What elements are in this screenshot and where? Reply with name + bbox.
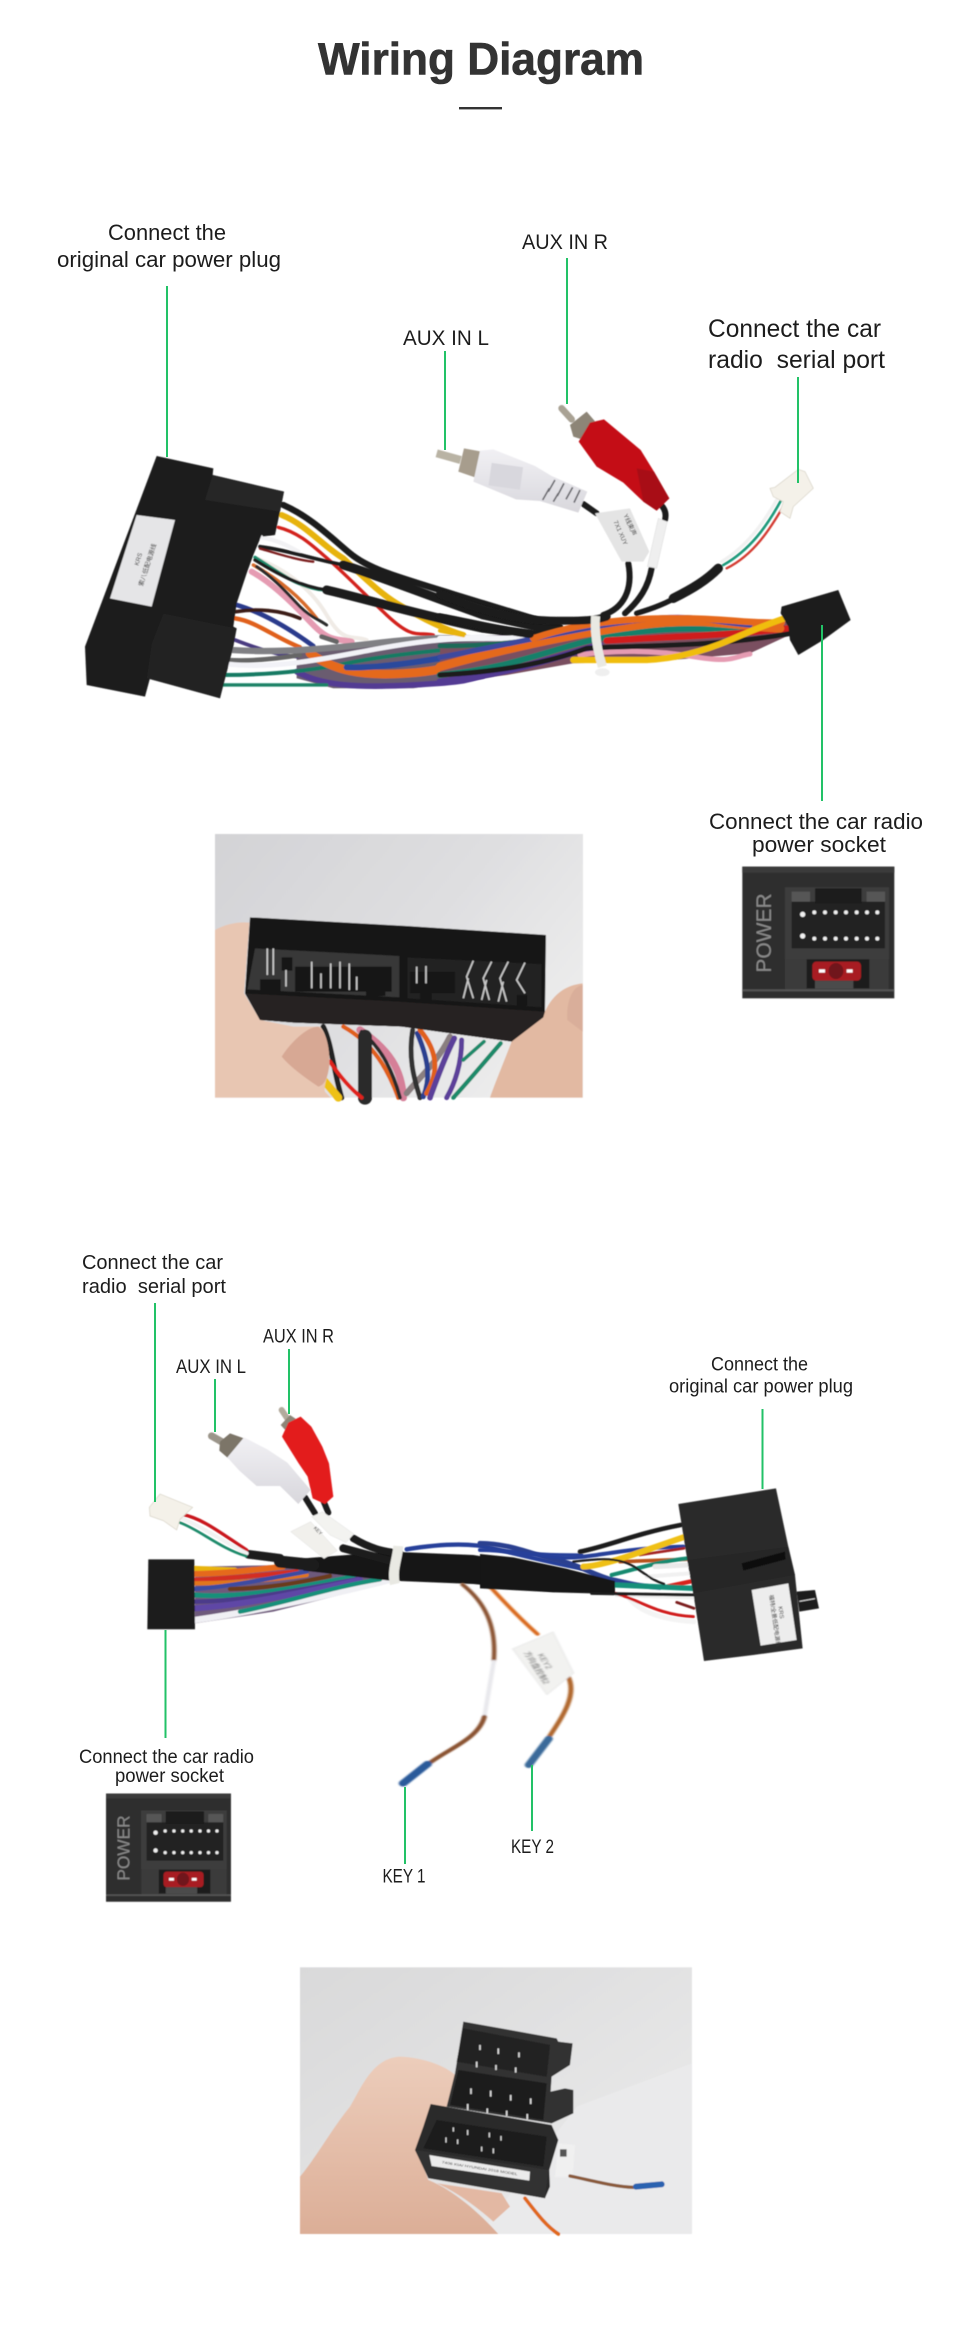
- leader: AUX IN R: [566, 258, 568, 404]
- bundle backing: [297, 628, 573, 688]
- leader: serial port: [797, 377, 799, 483]
- label: serial port: [708, 315, 885, 374]
- lower connector: [415, 2104, 558, 2198]
- harness 1 right: RCA plugs, serial port, socket: [437, 408, 851, 683]
- leader: AUX IN L: [444, 351, 446, 450]
- harness 2 left: serial port, RCA plugs, socket, bundle: [147, 1410, 582, 1629]
- label: original car power plug: Connect the: [711, 1354, 808, 1376]
- leader: serial port: [154, 1303, 156, 1502]
- plug body: [678, 1488, 803, 1661]
- harness 2 key wires: [403, 1585, 574, 1783]
- serial port connector: [770, 469, 813, 518]
- white tag and key wire: [555, 2143, 662, 2187]
- RCA tag: [595, 508, 649, 562]
- right hand: [490, 983, 583, 1098]
- serial port wires: [722, 500, 786, 568]
- label: original car power plug: original car power plug: [57, 247, 281, 272]
- power socket photo 2: POWER: [114, 1815, 134, 1881]
- plug body: [85, 456, 284, 698]
- plug paper label: [752, 1583, 797, 1648]
- leader: power socket: [821, 625, 823, 801]
- plug paper label: KRS: [776, 1606, 784, 1619]
- RCA plug white: [437, 448, 587, 513]
- RCA tag: 7X1 XUY: [611, 520, 629, 547]
- leader: AUX IN R: [288, 1349, 290, 1414]
- hand: [300, 2057, 498, 2234]
- label: KEY 1: KEY 1: [382, 1866, 426, 1888]
- harness 2 right: car power plug: [480, 1488, 819, 1661]
- power socket wires: [195, 1567, 390, 1620]
- blue wires: [407, 1545, 582, 1568]
- paper label: [429, 2155, 530, 2181]
- label: power socket: [709, 809, 923, 857]
- RCA sleeve: [647, 518, 667, 568]
- label: power socket: Connect the car radio: [709, 809, 923, 834]
- cable tie: [595, 616, 610, 676]
- label: serial port: Connect the car: [82, 1252, 223, 1274]
- label: AUX IN L: AUX IN L: [403, 327, 489, 350]
- fan-out wires: [222, 515, 483, 686]
- black cables: [303, 1552, 582, 1592]
- label: KEY 2: KEY 2: [511, 1837, 554, 1858]
- KEY2 tag: 方向盘控制2: [522, 1650, 553, 1685]
- RCA plug red: [281, 1410, 333, 1504]
- harness 1 left: plug and wires: [85, 456, 573, 698]
- label: AUX IN R: AUX IN R: [522, 231, 608, 254]
- plug paper label: 福特/全景低配电源线: [767, 1594, 783, 1648]
- label: AUX IN L: AUX IN L: [176, 1357, 246, 1378]
- black cables: [255, 505, 560, 637]
- RCA tags: KEY: [312, 1525, 324, 1537]
- RCA tags: [291, 1512, 354, 1559]
- RCA plug red: [562, 408, 669, 511]
- photo: hand holding ISO plug: [300, 1967, 692, 2234]
- wires below plug: [323, 1027, 501, 1098]
- cable tie: [394, 1546, 398, 1584]
- label: original car power plug: [669, 1354, 853, 1398]
- serial port connector: [149, 1494, 193, 1530]
- bundle backing: [440, 618, 793, 683]
- black cables: [440, 504, 718, 634]
- label: serial port: radio serial port: [82, 1276, 226, 1298]
- title: Wiring Diagram: [318, 34, 644, 84]
- plug tab: [797, 1590, 819, 1612]
- plug paper label: 索八低配电源线: [136, 542, 158, 587]
- bundle wires: [440, 617, 792, 682]
- KEY2 tag: [512, 1632, 574, 1695]
- leader: power socket: [164, 1630, 166, 1738]
- inner pin panels: [247, 948, 399, 997]
- leader: power plug: [762, 1409, 764, 1489]
- power socket photo 1: [742, 867, 894, 998]
- leader: KEY 1: [404, 1787, 406, 1864]
- plug body: [245, 917, 546, 1042]
- label: original car power plug: original car power plug: [669, 1376, 853, 1398]
- leader: power plug: [166, 286, 168, 457]
- label: power socket: Connect the car radio: [79, 1747, 254, 1768]
- power socket connector: [147, 1559, 195, 1629]
- upper connector: [447, 2022, 573, 2123]
- lower pins: [446, 2127, 501, 2153]
- KEY2 tag: KEY2: [535, 1652, 554, 1670]
- serial port wires: [180, 1514, 247, 1556]
- label: serial port: radio serial port: [708, 346, 885, 374]
- paper label: 7406 KIA/ HYUNDAI 2018 MODEL: [441, 2160, 518, 2176]
- title underline: [459, 107, 502, 109]
- label: power socket: [79, 1747, 254, 1787]
- label: serial port: Connect the car: [708, 315, 881, 343]
- plug paper label: [110, 515, 175, 607]
- fan backing: [195, 1565, 387, 1623]
- label: power socket: power socket: [115, 1766, 225, 1787]
- orange wire: [525, 2198, 558, 2234]
- photo: hand holding power plug: [215, 834, 583, 1098]
- wires into plug: [480, 1525, 694, 1622]
- upper pins: [468, 2045, 531, 2119]
- label: original car power plug: Connect the: [108, 220, 226, 245]
- power socket photo 2: [106, 1794, 231, 1902]
- power socket photo 1: POWER: [752, 893, 776, 973]
- contact pins: [267, 948, 525, 1002]
- label: power socket: power socket: [752, 832, 886, 857]
- label: original car power plug: [57, 220, 281, 272]
- label: serial port: [82, 1252, 226, 1298]
- leader: AUX IN L: [214, 1379, 216, 1432]
- leader: KEY 2: [531, 1765, 533, 1831]
- RCA tag: Y线束声: [621, 512, 639, 537]
- RCA plug white: [212, 1433, 311, 1504]
- plug paper label: KRS: [134, 552, 144, 567]
- power socket plug: [781, 590, 851, 655]
- label: AUX IN R: AUX IN R: [263, 1326, 334, 1348]
- black cables and sleeve: [480, 1554, 615, 1594]
- left hand: [215, 922, 331, 1098]
